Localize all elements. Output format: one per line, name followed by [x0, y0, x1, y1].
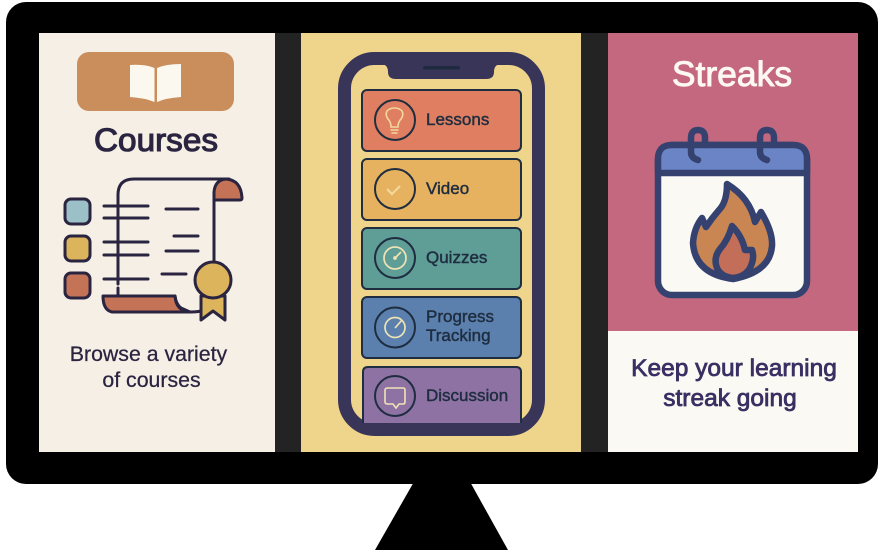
icon: light bulb — [386, 108, 403, 133]
card: video — [362, 159, 521, 220]
monitor stand — [375, 480, 508, 550]
caption: courses: of courses — [102, 368, 201, 392]
icon: gauge — [384, 247, 406, 269]
scroll bottom curl — [103, 296, 190, 312]
scroll body — [118, 179, 229, 284]
icon: check — [387, 186, 400, 194]
phone body — [344, 58, 538, 430]
flame — [693, 184, 772, 279]
caption: streaks: Keep your learning — [631, 355, 837, 382]
colour chips — [65, 199, 90, 298]
scroll top curl — [214, 179, 242, 200]
card: quizzes: Quizzes — [426, 248, 487, 267]
phone notch — [382, 64, 500, 79]
caption: courses — [70, 342, 228, 392]
panel: courses — [39, 33, 275, 452]
illustration: course scroll with list and ribbon — [65, 179, 242, 320]
card: discussion: Discussion — [426, 386, 508, 405]
icon: speech bubble — [385, 388, 405, 408]
panel: streaks — [608, 33, 858, 452]
heading: Courses: Courses — [94, 122, 218, 158]
ribbon seal — [195, 262, 231, 320]
card: progress tracking — [362, 297, 521, 358]
card: quizzes — [362, 228, 521, 289]
card: lessons: Lessons — [426, 110, 489, 129]
screen gutters — [39, 33, 858, 452]
icon: calendar with flame — [658, 130, 807, 295]
caption: streaks — [631, 355, 837, 412]
card: video: Video — [426, 179, 469, 198]
heading: Streaks: Streaks — [672, 54, 792, 94]
icon: gauge — [385, 318, 405, 338]
icon: book badge — [77, 52, 234, 111]
card: discussion — [363, 367, 521, 423]
caption: courses: Browse a variety — [70, 342, 228, 366]
card: progress tracking: Progress — [426, 307, 494, 326]
card: lessons — [362, 90, 521, 151]
card: progress tracking: Tracking — [426, 326, 491, 345]
panel: mobile app — [301, 33, 581, 452]
text lines — [104, 206, 198, 279]
caption: streaks: streak going — [663, 385, 797, 412]
